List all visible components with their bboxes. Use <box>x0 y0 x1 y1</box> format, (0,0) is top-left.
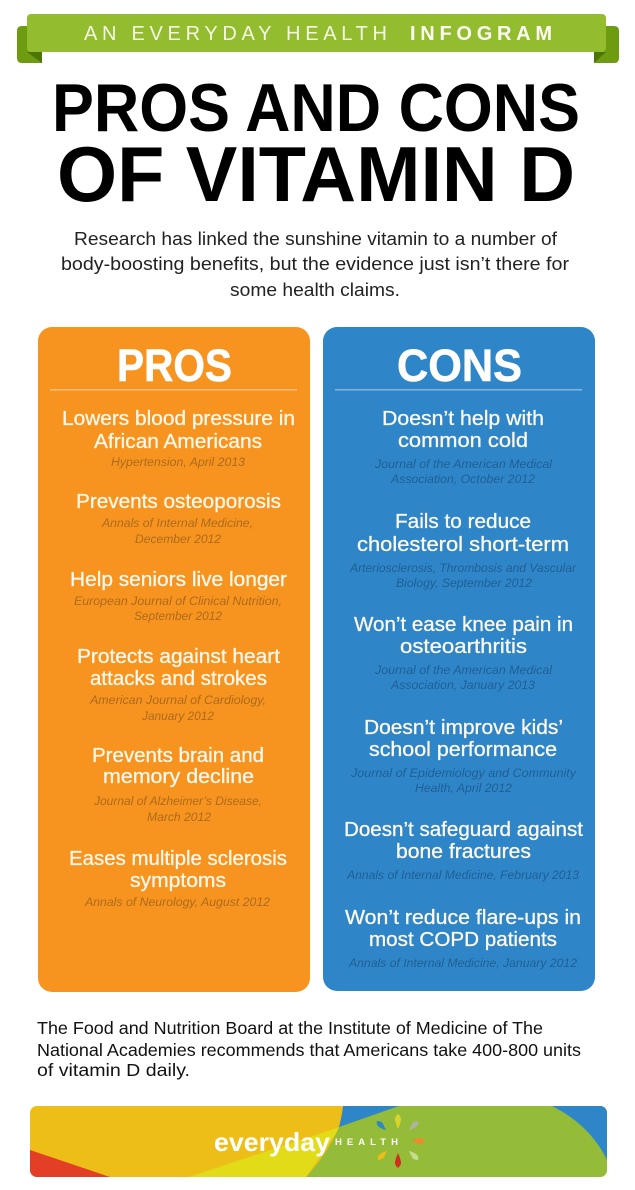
pro: blood pressure: Lowers blood pressure in <box>62 407 295 430</box>
con: COPD: Won’t reduce flare-ups in <box>345 906 581 929</box>
ribbon banner: INFOGRAM <box>410 23 552 45</box>
con: common cold: Doesn’t help with <box>382 407 544 430</box>
pro: brain: Prevents brain and <box>92 744 264 767</box>
recommendation text: The Food and Nutrition Board at the Institute of Medicine of The <box>37 1018 543 1038</box>
con: knee pain: Journal of the American Medical <box>374 665 552 677</box>
con: cholesterol: cholesterol short-term <box>357 533 569 556</box>
recommendation text <box>37 1018 581 1080</box>
con: bone fractures: Doesn’t safeguard against <box>344 818 583 841</box>
con: common cold: Journal of the American Medical <box>374 459 552 471</box>
con: bone fractures: bone fractures <box>396 840 531 863</box>
con: COPD: most COPD patients <box>369 928 557 951</box>
con: knee pain: Won’t ease knee pain in <box>354 613 573 636</box>
con: cholesterol: Biology, September 2012 <box>396 578 533 590</box>
title <box>52 70 580 218</box>
logo wordmark: HEALTH <box>335 1137 398 1148</box>
con: common cold: common cold <box>398 429 528 452</box>
pro: blood pressure <box>62 407 295 469</box>
con: knee pain: osteoarthritis <box>400 635 527 658</box>
con: cholesterol: Fails to reduce <box>395 510 531 533</box>
intro text <box>61 229 569 300</box>
footer logo band <box>30 1106 607 1177</box>
con: school performance <box>350 716 577 795</box>
con: bone fractures: Annals of Internal Medicine, February 2013 <box>346 870 580 882</box>
con: school performance: Health, April 2012 <box>415 783 513 795</box>
con: common cold: Association, October 2012 <box>390 474 536 486</box>
pro: seniors <box>70 568 287 623</box>
pro: heart: January 2012 <box>141 711 215 723</box>
intro text: Research has linked the sunshine vitamin to a number of <box>74 229 558 249</box>
ribbon banner <box>17 14 619 63</box>
pro: sclerosis <box>69 847 287 909</box>
pro: seniors: September 2012 <box>134 611 223 623</box>
pro: brain: Journal of Alzheimer’s Disease, <box>93 796 262 808</box>
pro: seniors: Help seniors live longer <box>70 568 287 591</box>
pro: osteoporosis: Prevents osteoporosis <box>76 490 281 513</box>
con: cholesterol <box>349 510 577 590</box>
pro: blood pressure: Hypertension, April 2013 <box>111 457 246 469</box>
title: PROS AND CONS <box>52 70 580 146</box>
con: common cold <box>374 407 552 486</box>
pro: sclerosis: Eases multiple sclerosis <box>69 847 287 870</box>
con: school performance: school performance <box>369 738 557 761</box>
pro: brain <box>92 744 264 824</box>
con: knee pain <box>354 613 573 692</box>
ribbon banner: AN EVERYDAY HEALTH <box>84 23 387 45</box>
con: school performance: Doesn’t improve kids’ <box>364 716 563 739</box>
icon: logo sun drops <box>377 1114 425 1168</box>
intro text: body-boosting benefits, but the evidence just isn’t there for <box>61 254 569 274</box>
pro: sclerosis: symptoms <box>130 869 226 892</box>
pro: heart: American Journal of Cardiology, <box>89 695 266 707</box>
logo wordmark: everyday <box>214 1127 331 1157</box>
pro: osteoporosis <box>76 490 281 546</box>
pro: osteoporosis: December 2012 <box>135 534 222 546</box>
pro: brain: March 2012 <box>147 812 212 824</box>
pro: heart: Protects against heart <box>77 645 280 668</box>
title: OF VITAMIN D <box>57 130 575 218</box>
pro: heart <box>77 645 280 723</box>
pro: brain: memory decline <box>103 765 254 788</box>
panel: pros <box>38 327 310 992</box>
pro: blood pressure: African Americans <box>94 430 262 453</box>
con: school performance: Journal of Epidemiology and Community <box>350 768 577 780</box>
pro: seniors: European Journal of Clinical Nutrition, <box>74 596 282 608</box>
con: bone fractures <box>344 818 583 882</box>
pro: heart: attacks and strokes <box>90 667 267 690</box>
pro: osteoporosis: Annals of Internal Medicine, <box>101 518 253 530</box>
con: knee pain: Association, January 2013 <box>390 680 536 692</box>
heading: cons: CONS <box>397 340 522 391</box>
intro text: some health claims. <box>230 280 400 300</box>
recommendation text: of vitamin D daily. <box>37 1060 190 1080</box>
con: cholesterol: Arteriosclerosis, Thrombosis and Vascular <box>349 563 577 575</box>
panel: cons <box>323 327 595 991</box>
logo wordmark <box>214 1127 398 1157</box>
heading: pros: PROS <box>117 340 232 391</box>
recommendation text: National Academies recommends that Americans take 400-800 units <box>37 1040 581 1060</box>
con: COPD: Annals of Internal Medicine, January 2012 <box>348 958 578 970</box>
con: COPD <box>345 906 581 970</box>
pro: sclerosis: Annals of Neurology, August 2012 <box>84 897 271 909</box>
